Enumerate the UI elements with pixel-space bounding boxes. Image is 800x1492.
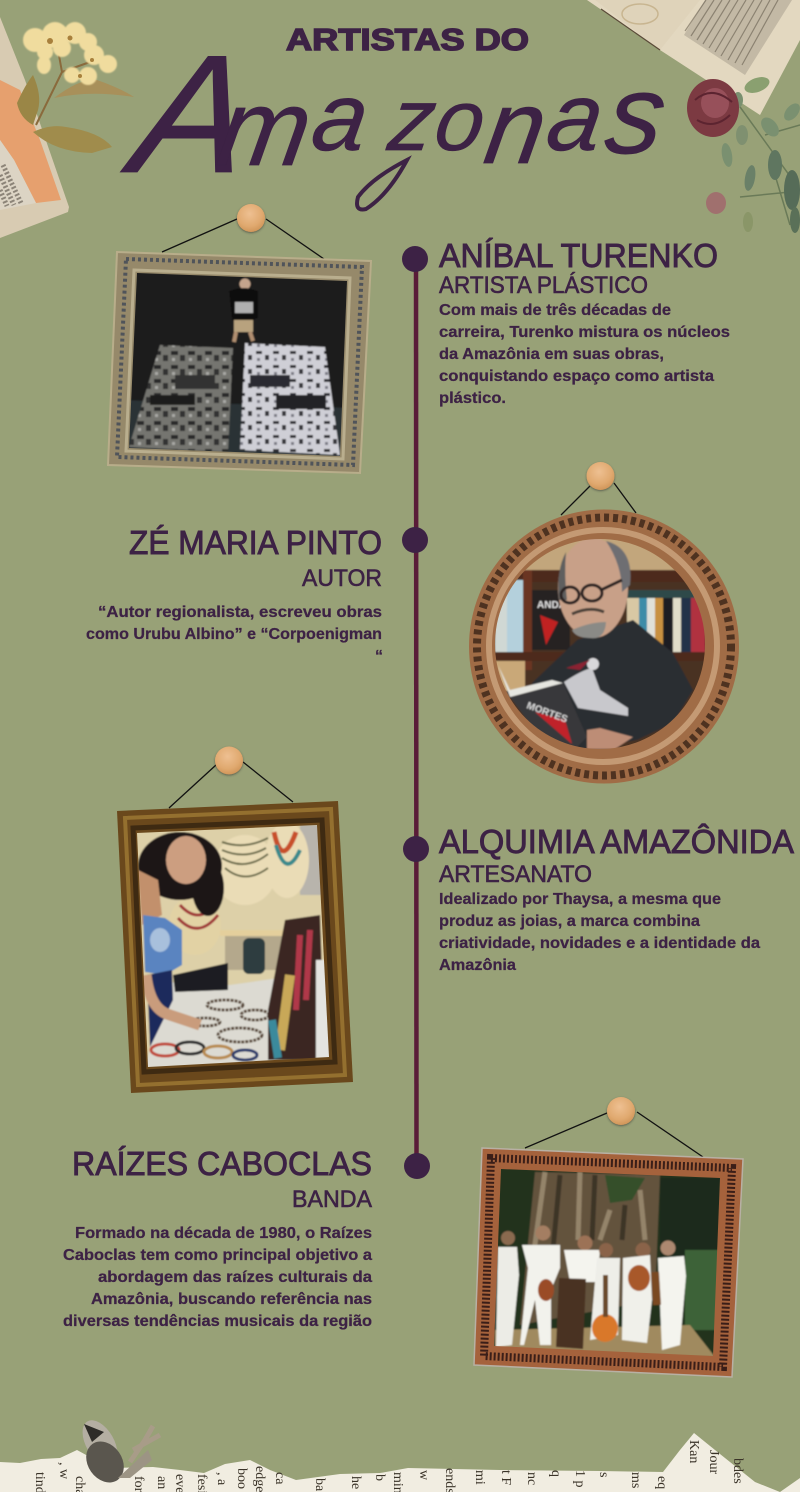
- collage: top-right book: [587, 0, 800, 115]
- musician 6: [660, 1240, 676, 1256]
- rotated page text: q: [548, 1470, 563, 1477]
- torn newspaper strip: [0, 1433, 800, 1492]
- lantern: [243, 938, 265, 974]
- tapestry left: [129, 345, 233, 452]
- rotated page text: 1 p: [572, 1470, 587, 1488]
- text: Raízes Caboclas: [63, 1145, 372, 1330]
- text: Aníbal Turenko: Com mais de três décadas de: [439, 302, 671, 319]
- text: Aníbal Turenko: [439, 237, 730, 407]
- rotated page text: boo: [234, 1468, 249, 1489]
- hanging strings: [525, 1112, 703, 1157]
- pin: [607, 1097, 635, 1125]
- rotated page text: , w: [56, 1462, 71, 1480]
- rotated page text: for: [131, 1476, 146, 1492]
- musician 2: [536, 1226, 550, 1240]
- text: Aníbal Turenko: ARTISTA PLÁSTICO: [439, 272, 648, 299]
- hand: [587, 728, 633, 749]
- pin: [586, 462, 614, 490]
- glasses: [561, 580, 622, 603]
- rotated page text: Kan: [686, 1440, 701, 1463]
- musician 3: [578, 1236, 592, 1250]
- timeline dot 2: [402, 527, 428, 553]
- woman skin: [166, 836, 206, 884]
- icon: butterfly: [75, 1414, 160, 1490]
- hanging strings: [162, 219, 324, 259]
- title: Amazonas script: o: [429, 73, 492, 169]
- text: Alquimia Amazônida: produz as joias, a marca combina: [439, 913, 700, 930]
- book on shelf: [532, 590, 570, 650]
- text: Aníbal Turenko: carreira, Turenko mistura os núcleos: [439, 324, 730, 341]
- round frame: [469, 510, 739, 784]
- musician 1: [501, 1231, 515, 1245]
- rotated page text: ca: [272, 1472, 287, 1485]
- colourful books: [627, 590, 705, 598]
- book page: [0, 17, 69, 238]
- photo: [137, 825, 329, 1067]
- necklace displays: [218, 835, 272, 905]
- hanging strings: [561, 483, 636, 515]
- frame: [474, 1148, 743, 1377]
- text: Alquimia Amazônida: criatividade, novidades e a identidade da: [439, 935, 760, 952]
- title: Amazonas script: n: [478, 70, 555, 186]
- title: Amazonas script: m: [211, 69, 320, 189]
- person: [240, 278, 250, 290]
- photo: MORTES: [525, 700, 569, 726]
- text: Raízes Caboclas: RAÍZES CABOCLAS: [72, 1145, 372, 1182]
- text: Alquimia Amazônida: Idealizado por Thaysa, a mesma que: [439, 891, 721, 908]
- script flourish of the z: [357, 160, 407, 210]
- rotated page text: mi: [472, 1470, 487, 1485]
- text: Zé Maria Pinto: “Autor regionalista, escreveu obras: [98, 604, 382, 621]
- rotated page text: [32, 1440, 745, 1492]
- hanging strings: [169, 762, 293, 808]
- rotated page text: bdes: [730, 1458, 745, 1484]
- text: Zé Maria Pinto: [86, 524, 383, 665]
- timeline: [402, 246, 430, 1179]
- text: Zé Maria Pinto: AUTOR: [302, 565, 382, 592]
- text: Zé Maria Pinto: como Urubu Albino” e “Corpoenigman: [86, 626, 382, 643]
- rotated page text: eq: [654, 1476, 669, 1489]
- open book: [510, 683, 587, 747]
- flower blossoms: [23, 22, 117, 85]
- rotated page text: ms: [628, 1472, 643, 1488]
- text: Zé Maria Pinto: ZÉ MARIA PINTO: [129, 524, 382, 561]
- title: Amazonas script: s: [599, 52, 675, 177]
- musician 4: [599, 1243, 613, 1257]
- guitarist shirt print: [564, 668, 628, 716]
- panel: Raízes Caboclas framed photo: [474, 1097, 743, 1377]
- head: [558, 538, 628, 638]
- rotated page text: b: [372, 1474, 387, 1481]
- musician 5: [636, 1242, 650, 1258]
- arm: [146, 975, 200, 1025]
- rotated page text: , a: [214, 1472, 229, 1486]
- title: Artistas do: ARTISTAS DO: [286, 22, 529, 57]
- title: Amazonas script: [114, 20, 680, 209]
- rose bud: [706, 192, 726, 214]
- woman top: [143, 915, 182, 975]
- woman hair: [138, 832, 222, 900]
- text: Aníbal Turenko: conquistando espaço como artista: [439, 368, 714, 385]
- text: Raízes Caboclas: BANDA: [292, 1186, 372, 1213]
- table with jewellery: [148, 978, 284, 1067]
- guitar: [592, 1314, 618, 1342]
- frame: [117, 801, 353, 1093]
- torn orange paper: [0, 80, 61, 203]
- panel: Zé Maria Pinto round framed photo: [469, 462, 739, 784]
- panel: Aníbal Turenko framed photo: [108, 204, 371, 473]
- pin: [215, 746, 243, 774]
- rotated page text: ba: [312, 1478, 327, 1492]
- rotated page text: w: [416, 1470, 431, 1481]
- photo: ANDAM: [537, 600, 574, 611]
- text: Aníbal Turenko: ANÍBAL TURENKO: [439, 237, 718, 274]
- shirt: [532, 620, 693, 749]
- rotated page text: Jour: [706, 1450, 721, 1474]
- text: Aníbal Turenko: da Amazônia em suas obras,: [439, 346, 664, 363]
- text: Raízes Caboclas: diversas tendências musicais da região: [63, 1313, 372, 1330]
- woman skirt: [147, 970, 173, 1047]
- pressed leaves: [54, 80, 134, 98]
- rotated page text: nc: [524, 1472, 539, 1485]
- text: Raízes Caboclas: Amazônia, buscando referência nas: [91, 1291, 372, 1308]
- stems and foliage: [735, 100, 800, 225]
- rotated page text: an: [154, 1476, 169, 1489]
- text: Alquimia Amazônida: Amazônia: [439, 957, 516, 974]
- text: Raízes Caboclas: abordagem das raízes culturais da: [98, 1269, 372, 1286]
- timeline dot 4: [404, 1153, 430, 1179]
- title: Amazonas script: z: [382, 70, 443, 169]
- timeline dot 3: [403, 836, 429, 862]
- frame: [108, 252, 371, 473]
- collage: top-left book and pressed flowers: [0, 17, 134, 238]
- drum: [556, 1278, 586, 1349]
- ground: [495, 1325, 715, 1357]
- text: Raízes Caboclas: Caboclas tem como principal objetivo a: [63, 1247, 372, 1264]
- text: Alquimia Amazônida: ARTESANATO: [439, 861, 592, 888]
- rotated page text: t F: [498, 1470, 513, 1485]
- rotated page text: he: [348, 1476, 363, 1489]
- tapestry right: [240, 343, 340, 455]
- text: Aníbal Turenko: plástico.: [439, 390, 506, 407]
- photo: [495, 539, 705, 749]
- flower stems: [36, 50, 90, 125]
- title: Amazonas script: a: [541, 65, 611, 171]
- bracelet stand: [268, 915, 325, 1060]
- collage: rose and leaves: [687, 74, 800, 233]
- rotated page text: s: [596, 1472, 611, 1477]
- title: Amazonas script: a: [306, 65, 376, 171]
- timeline dot 1: [402, 246, 428, 272]
- text: Raízes Caboclas: Formado na década de 1980, o Raízes: [75, 1225, 372, 1242]
- panel: Alquimia Amazônida framed photo: [117, 746, 353, 1093]
- text: Alquimia Amazônida: ALQUIMIA AMAZÔNIDA: [439, 823, 794, 860]
- pin: [237, 204, 265, 232]
- text: Alquimia Amazônida: [439, 823, 794, 974]
- photo: [129, 273, 347, 456]
- photo: [490, 1165, 725, 1360]
- title: Amazonas script: A: [114, 20, 265, 208]
- tree trunks: [520, 1172, 660, 1325]
- rose bloom: [687, 79, 739, 137]
- rotated page text: edge: [252, 1466, 267, 1492]
- text: Zé Maria Pinto: “: [375, 648, 383, 665]
